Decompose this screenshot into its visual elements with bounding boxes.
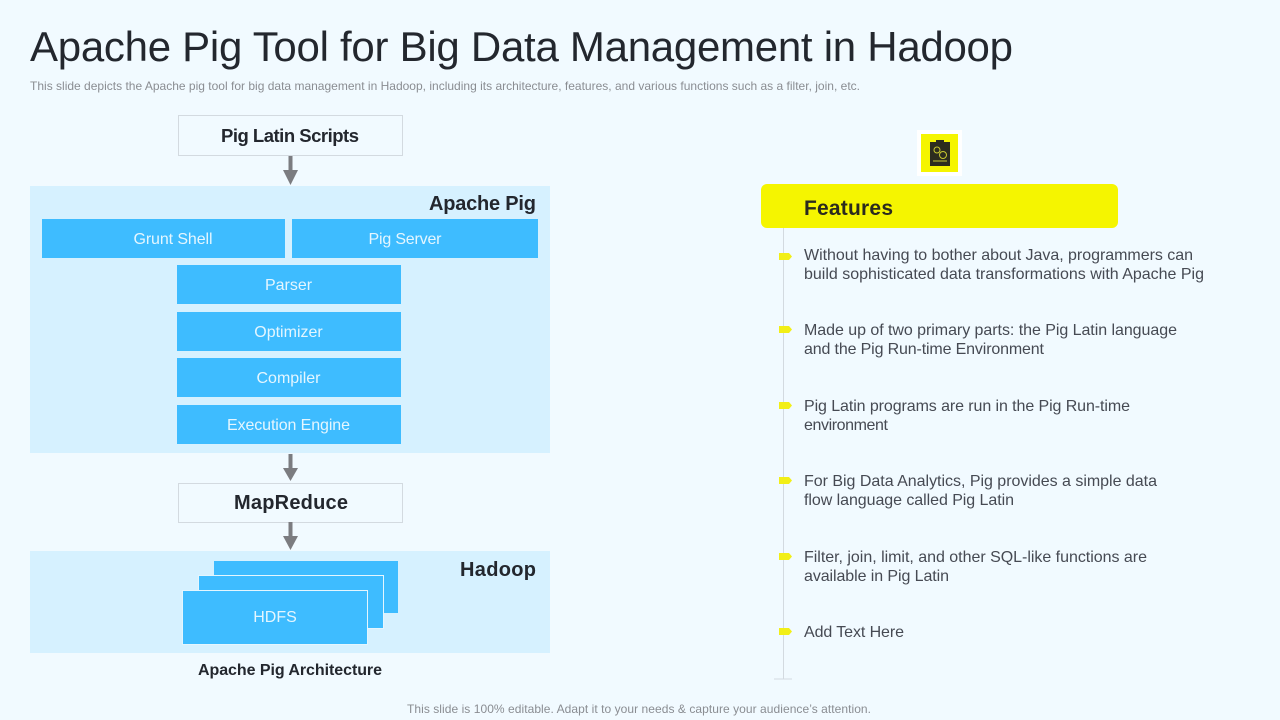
heading: Features: Features: [804, 197, 893, 220]
feature item 6: Add Text Here: [804, 624, 904, 641]
feature item 4: [779, 473, 1157, 509]
feature item 4: flow language called Pig Latin: [804, 492, 1014, 509]
heading: Apache Pig: Apache Pig: [429, 193, 536, 215]
box: Pig Latin Scripts: Pig Latin Scripts: [221, 125, 359, 146]
feature item 2: Made up of two primary parts: the Pig Latin language: [804, 322, 1177, 339]
timeline line: [774, 228, 792, 679]
feature item 4: For Big Data Analytics, Pig provides a simple data: [804, 473, 1157, 490]
feature item 1: [779, 247, 1204, 283]
heading: Features: [761, 184, 1118, 228]
feature item 2: and the Pig Run-time Environment: [804, 341, 1045, 358]
stacked boxes: HDFS: [182, 561, 398, 644]
box: MapReduce: [178, 484, 402, 522]
box: Grunt Shell: Grunt Shell: [134, 231, 212, 248]
box: Optimizer: [177, 312, 401, 351]
feature item 3: [779, 398, 1130, 434]
box: Parser: [177, 265, 401, 304]
subtitle: This slide depicts the Apache pig tool for big data management in Hadoop, including its architecture, features, and various functions such as a filter, join, etc.: [30, 79, 860, 93]
footer note: This slide is 100% editable. Adapt it to your needs & capture your audience’s attention.: [407, 702, 871, 716]
arrow: MapReduce to Hadoop: [283, 522, 298, 550]
feature item 1: build sophisticated data transformations with Apache Pig: [804, 266, 1204, 283]
box: MapReduce: MapReduce: [234, 492, 348, 514]
heading: Hadoop: Hadoop: [460, 559, 536, 581]
title: Apache Pig Tool for Big Data Management in Hadoop: [30, 23, 1013, 70]
feature item 5: Filter, join, limit, and other SQL-like functions are: [804, 549, 1147, 566]
box: Compiler: Compiler: [256, 370, 321, 387]
arrow: Apache Pig to MapReduce: [283, 454, 298, 481]
panel: features list: [761, 184, 1204, 679]
feature item 2: [779, 322, 1177, 358]
feature item 5: [779, 549, 1147, 585]
box: Compiler: [177, 358, 401, 397]
feature item 5: available in Pig Latin: [804, 568, 949, 585]
feature item 3: environment: [804, 417, 889, 434]
box: Execution Engine: [177, 405, 401, 444]
box: Grunt Shell: [42, 219, 285, 258]
icon: clipboard on yellow tile: [917, 130, 962, 176]
caption: Apache Pig Architecture: Apache Pig Architecture: [198, 662, 382, 679]
box: Execution Engine: Execution Engine: [227, 417, 350, 434]
box: Pig Latin Scripts: [178, 116, 402, 156]
panel: architecture diagram: [30, 116, 550, 679]
panel: Apache Pig: [30, 186, 550, 453]
box: Parser: Parser: [265, 277, 313, 294]
box: Pig Server: [292, 219, 538, 258]
feature item 1: Without having to bother about Java, programmers can: [804, 247, 1193, 264]
arrow: scripts to Apache Pig: [283, 156, 298, 185]
feature item 3: Pig Latin programs are run in the Pig Run-time: [804, 398, 1130, 415]
box: Pig Server: Pig Server: [368, 231, 442, 248]
stacked boxes: HDFS: HDFS: [253, 609, 297, 626]
panel: Hadoop: [30, 551, 550, 653]
box: Optimizer: Optimizer: [254, 324, 323, 341]
